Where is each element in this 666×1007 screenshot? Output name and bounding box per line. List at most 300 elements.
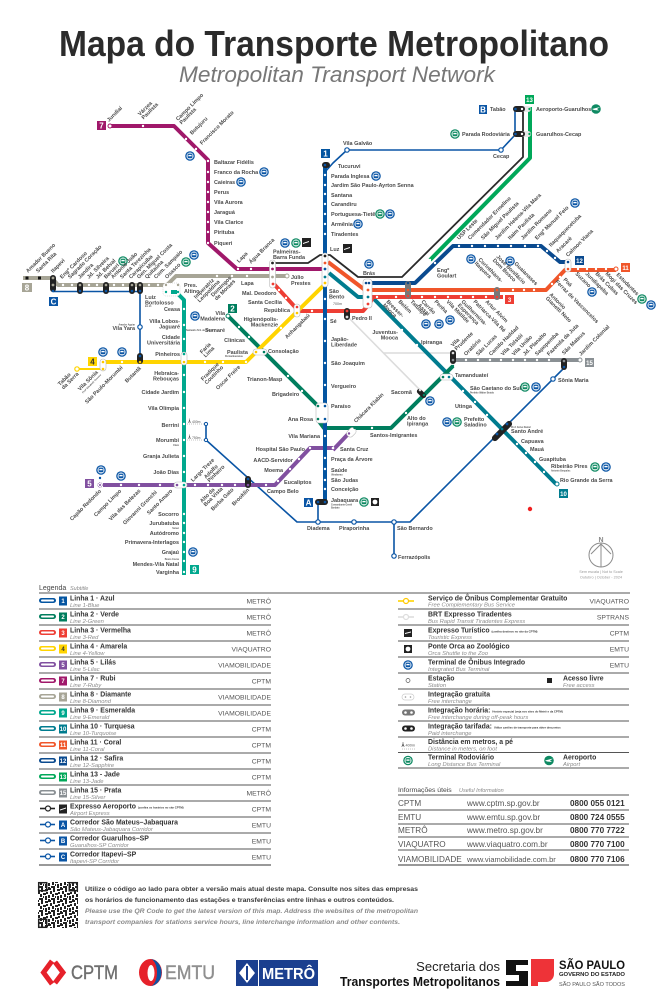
row: airport express: Airport Express [69, 811, 110, 817]
station labels: line 5: Eucaliptos [284, 480, 312, 486]
icon: bus terminal Caieiras [236, 177, 246, 187]
station labels: lines 7 and 8: Santa Rita [35, 251, 59, 274]
icon: road terminal Sao Caetano [520, 382, 530, 392]
row: tourist express [398, 628, 629, 641]
station labels: line 1 and corridors: 700m [333, 302, 342, 306]
station labels: lines 2 and 4: Mal. Deodoro [242, 291, 277, 297]
icon: road terminal Tiete [375, 209, 385, 219]
station labels: line 9 and corridor C [113, 295, 181, 576]
station labels: lines 3, 11, 12: Engº Manuel Feio [534, 205, 571, 241]
badge 8: 8 [25, 284, 30, 292]
row: walking distance: 400m [406, 744, 415, 748]
station labels: lines 7 and 8: Palmeiras- [273, 250, 301, 256]
footer note: transport companies for stations service hours, line interchange information and other contents. [85, 919, 400, 926]
row: VIAMOBILIDADE: VIAMOBILIDADE [398, 855, 462, 864]
station labels: lines 7 and 8: Altino [184, 289, 200, 295]
corridor B Guarulhos-SP [325, 108, 515, 172]
row: CPTM: www.cptm.sp.gov.br [466, 799, 540, 808]
station labels: line 1 and corridors: Japão- [331, 337, 349, 343]
badge 8 [22, 283, 32, 292]
station labels: lines 7 and 8: Barueri [103, 262, 121, 280]
row: METRO: www.metro.sp.gov.br [466, 826, 543, 835]
station labels: lines 2 and 4: da Serra [61, 371, 81, 391]
station labels: lines 2 and 4: Fradique [200, 362, 221, 382]
icon: bus terminal Guaianases [505, 256, 515, 266]
station labels: lines 7 and 8: Lapa [241, 281, 255, 287]
station labels: lines 2 and 4 [57, 291, 489, 439]
row: free bus service: Serviço de Ônibus Complementar Gratuito [428, 594, 567, 602]
row: line 7: 7 [61, 679, 65, 685]
station labels: line 9 and corridor C: km 21 [145, 306, 152, 308]
line 15 prata [453, 358, 582, 362]
row: CPTM: 0800 055 0121 [570, 799, 625, 808]
capsule: Butanta [137, 353, 143, 364]
station labels: line 9 and corridor C: Mendes-Vila Natal [133, 562, 179, 568]
row: CPTM [398, 799, 625, 808]
station labels: lines 3, 11, 12 [352, 192, 640, 334]
station labels: lines 2 and 4: Mackenzie [251, 322, 278, 328]
row: line 9: Linha 9 · Esmeralda [70, 708, 135, 714]
station labels: lines 7 and 8: Francisco Morato [199, 110, 236, 146]
row: line 11: Line 11-Coral [70, 747, 105, 753]
station labels: lines 3, 11, 12: Guilhermina- [460, 299, 488, 327]
station labels: lines 7 and 8: Perus [214, 190, 229, 196]
row: EMTU: EMTU [398, 813, 421, 822]
station labels: lines 10 and 15: Vila Tolstói [500, 333, 525, 357]
icon: tourist express Luz [343, 244, 352, 253]
capsule: Consolacao [253, 349, 267, 355]
station labels: lines 3, 11, 12: Artur Alvim [484, 299, 509, 324]
badge 5 [85, 479, 94, 488]
line 3 vermelha [273, 283, 503, 311]
station labels: lines 10 and 15: Oratório [463, 338, 483, 357]
station labels: lines 3, 11, 12: USP Leste [456, 218, 479, 241]
station labels: lines 2 and 4: Ana Rosa [288, 417, 314, 423]
station labels: lines 7 and 8: Com. Sampaio [153, 249, 185, 280]
logo: METRO: METRÔ [262, 965, 315, 983]
row: line 15: Line 15-Silver [70, 795, 107, 801]
capsule: Tamanduatei [440, 374, 453, 380]
compass: N [598, 537, 604, 544]
station labels: lines 3, 11, 12: Aracaré [555, 236, 574, 254]
station labels: line 1 and corridors: Vila Mariana [288, 434, 321, 440]
row: corridor C: EMTU [252, 854, 271, 862]
capsule: Pedro II [344, 308, 350, 320]
station labels: line 1 and corridors: Liberdade [331, 342, 357, 348]
station labels: lines 10 and 15: Ribeirão Pires [551, 464, 588, 470]
capsule: Tatuape [405, 281, 411, 299]
compass: Sem escala | Not to Scale [579, 570, 623, 574]
airport express line [273, 107, 523, 277]
station labels: line 1 and corridors [288, 107, 591, 561]
icon: road terminal Barueri [118, 256, 128, 266]
station labels: lines 7 and 8: Botujuru [189, 116, 209, 136]
row: road terminal and airport: Airport [562, 762, 580, 768]
logo: SP shapes [506, 959, 554, 986]
station labels: lines 3, 11, 12: Gianetti Neto [544, 296, 573, 324]
station labels: line 9 and corridor C: Socorro [158, 512, 180, 518]
row: paid interchange: Paid interchange [428, 731, 472, 737]
station labels: line 9 and corridor C: Cidade Jardim [142, 390, 179, 396]
capsule: Santo Amaro [174, 482, 187, 488]
walking links Berrini and Morumbi: 750m [192, 436, 201, 440]
station labels: lines 3, 11, 12: Jardim Romano [520, 208, 554, 241]
station labels: line 5: Giovanni Gronchi [122, 490, 159, 526]
row: line 12: 12 [60, 759, 67, 765]
row: corridor C: C [61, 855, 66, 861]
station labels: lines 7 and 8: Caieiras [214, 180, 235, 186]
icon: bus terminal Francisco Morato [185, 151, 195, 161]
badge B: B [480, 106, 486, 114]
government of Sao Paulo wordmark [559, 959, 626, 988]
station labels: lines 7 and 8: Barra Funda [273, 255, 306, 261]
row: corridor C: Itapevi-SP Corridor [70, 859, 120, 865]
icon: road terminal Prefeito Saladino [452, 417, 462, 427]
station labels: line 5: Campo Limpo [93, 488, 124, 518]
station labels: line 5: Vila das Belezas [108, 488, 142, 522]
logo: CPTM: CPTM [71, 963, 118, 984]
station labels: line 9 and corridor C: Grajaú [162, 550, 179, 556]
station labels: lines 3, 11, 12: Penha [433, 299, 449, 316]
row: BRT: Bus Rapid Transit Tiradentes Express [428, 619, 525, 625]
badge 5: 5 [87, 480, 92, 488]
icon: road terminal Osasco [181, 257, 191, 267]
station labels: line 9 and corridor C: Villa Lobos- [149, 319, 180, 325]
station labels: lines 7 and 8: Prestes [291, 281, 311, 287]
capsule: Santo Andre [491, 420, 513, 442]
capsule: Paraiso and Ana Rosa [316, 403, 328, 423]
row: orca shuttle [398, 644, 629, 657]
station labels: lines 2 and 4: Oscar Freire [215, 365, 242, 391]
station labels: lines 2 and 4: Coutinho [204, 365, 225, 386]
footer note: Utilize o código ao lado para obter a versão mais atual deste mapa. Consulte nos sites das empresas [85, 886, 418, 893]
row: corridor B: EMTU [252, 838, 271, 846]
station labels: lines 7 and 8: Jd. Belval [95, 258, 118, 280]
station labels: lines 3, 11, 12: Brás [363, 271, 375, 277]
icon: road terminal Estudantes [637, 294, 647, 304]
line 4 amarela [75, 284, 325, 371]
station labels: lines 3, 11, 12: Assaí [416, 303, 431, 318]
row: line 11: 11 [60, 743, 67, 749]
station labels: lines 7 and 8: de Moraes [214, 279, 237, 302]
station labels: lines 3, 11, 12: Guaianases [513, 261, 538, 287]
station labels: line 5: Pinheiro [207, 464, 227, 484]
row: line 9: Line 9-Emerald [70, 715, 110, 721]
row: line 7: Line 7-Ruby [70, 683, 102, 689]
icon: bus terminal Sao Caetano [531, 382, 541, 392]
row: EMTU: 0800 724 0555 [570, 813, 625, 822]
station labels: lines 2 and 4: São Paulo-Morumbi [84, 365, 125, 405]
station labels: lines 10 and 15: São Mateus [561, 331, 587, 356]
station labels: lines 2 and 4: Butantã [124, 365, 143, 384]
logo: CPTM [44, 961, 118, 984]
station labels: lines 10 and 15: Fazenda da Juta [546, 323, 581, 357]
row: METRO: 0800 770 7722 [570, 826, 625, 835]
station labels: lines 7 and 8: Piqueri [214, 241, 233, 247]
station labels: line 1 and corridors: Jabaquara [331, 498, 359, 504]
capsule: Tucuruvi [322, 162, 330, 168]
station labels: line 1 and corridors: Vila Galvão [343, 141, 373, 147]
government of Sao Paulo wordmark: GOVERNO DO ESTADO [559, 972, 625, 978]
station labels: lines 10 and 15: Jardim Colonial [578, 324, 612, 357]
row: airport express: CPTM [252, 806, 271, 814]
row: corridor B: B [61, 839, 66, 845]
row: walking distance: Distância em metros, a pé [428, 739, 513, 746]
station labels: lines 3, 11, 12: Belém [397, 299, 412, 315]
title: Mapa do Transporte Metropolitano [59, 23, 609, 64]
icon: bus terminal Capao Redondo [96, 465, 106, 475]
row: line 9 [39, 708, 271, 721]
station labels: lines 3, 11, 12: Jundiapeba [584, 271, 610, 297]
icon: bus terminal Eng Manuel Feio [570, 198, 580, 208]
row: tourist express: CPTM [610, 630, 629, 638]
icon: zoo shuttle Jabaquara [371, 498, 379, 506]
icon: tourist express Barra Funda [302, 238, 311, 247]
row: line 11 [39, 740, 271, 753]
row: line 10: Linha 10 · Turquesa [70, 724, 135, 730]
station labels: lines 10 and 15: Santo André [511, 429, 543, 435]
station labels: line 1 and corridors: Luz [330, 247, 340, 253]
station labels: line 1 and corridors: Cecap [493, 154, 510, 160]
row: free interchange: Free interchange [428, 699, 473, 705]
capsule: Sacoma [416, 388, 427, 399]
station labels: lines 3, 11, 12: Suzano [574, 271, 592, 290]
row: line 2: 2 [61, 615, 65, 621]
station labels: lines 2 and 4: Alto do [407, 416, 426, 422]
row: line 7 [39, 676, 271, 689]
station labels: lines 3, 11, 12: Calmon Viana [565, 228, 595, 258]
station labels: lines 3, 11, 12: Itaim Paulista [507, 212, 537, 241]
station labels: line 9 and corridor C: Primavera-Interlagos [125, 540, 179, 546]
logo: EMTU [139, 959, 215, 986]
legend: lines [39, 596, 271, 865]
row: VIAMOBILIDADE: 0800 770 7106 [570, 855, 625, 864]
row: line 12: Line 12-Sapphire [70, 763, 115, 769]
icon: bus terminal Osasco [189, 250, 199, 260]
station labels: lines 2 and 4: Tabão [57, 372, 72, 387]
row: BRT: SPTRANS [597, 614, 629, 622]
station labels: line 9 and corridor C: Granja Julieta [143, 454, 180, 460]
row: line 1 [39, 596, 271, 609]
badge 13 [525, 95, 534, 104]
row: line 4: Linha 4 · Amarela [70, 644, 127, 650]
badge 1 [321, 149, 330, 158]
station labels: line 1 and corridors: Portuguesa-Tietê [331, 212, 375, 218]
useful information heading: Informações úteis [398, 787, 452, 794]
station labels: line 9 and corridor C: Vila Olímpia [148, 406, 180, 412]
station labels: line 9 and corridor C: Claro [173, 445, 180, 447]
station labels: lines 2 and 4: Santos-Imigrantes [370, 433, 417, 439]
station labels: lines 7 and 8: Baltazar Fidélis [214, 160, 254, 166]
station labels: line 9 and corridor C: Luiz [145, 295, 156, 301]
station labels: line 9 and corridor C: Pinheiros [155, 352, 180, 358]
station labels: line 1 and corridors: Piraporinha [339, 526, 370, 532]
station labels: line 5: Adolfo [203, 464, 220, 480]
row: corridor C: Corredor Itapevi–SP [70, 852, 137, 858]
station labels: lines 7 and 8: Várzea [137, 101, 154, 117]
station labels: lines 2 and 4: Chácara Klabin [353, 392, 385, 424]
row: line 13: Line 13-Jade [70, 779, 104, 785]
row: corridor A: Corredor São Mateus–Jabaquara [70, 820, 178, 826]
line number badges [22, 95, 630, 574]
station labels: lines 10 and 15: Prof. Celso Daniel [511, 427, 531, 429]
station labels: line 9 and corridor C: Vila Yara [113, 326, 136, 332]
station labels: line 1 and corridors: Ultrafarma [331, 474, 343, 476]
row: tourist express: Expresso Turístico (confira destinos no site da CPTM) [428, 628, 538, 634]
station labels: lines 2 and 4: República [264, 308, 291, 314]
row: line 4: VIAQUATRO [231, 646, 271, 654]
station labels: lines 2 and 4: Higienópolis- [244, 317, 278, 323]
capsule: Brooklin [245, 476, 251, 488]
station labels: line 5: Hospital São Paulo [256, 447, 306, 453]
station labels: lines 7 and 8: Jaraguá [214, 210, 236, 216]
row: VIAQUATRO: www.viaquatro.com.br [466, 840, 548, 849]
line 8 diamante [23, 274, 289, 285]
interchange capsules [50, 106, 571, 505]
station labels: lines 3, 11, 12: Mooca [381, 303, 398, 320]
badge 7 [97, 121, 106, 130]
capsule: Vila Prudente [450, 350, 456, 367]
station labels: line 1 and corridors: Santana [331, 193, 353, 199]
station labels: lines 10 and 15: Prefeito [464, 417, 484, 423]
station labels: line 1 and corridors: Conceição [331, 487, 359, 493]
station labels: line 1 and corridors: São Bernardo [397, 526, 433, 532]
station labels: lines 2 and 4: Santuário N.S. de Fátima [186, 329, 214, 332]
badge A: A [306, 498, 312, 508]
station labels: lines 3, 11, 12: Poá [562, 277, 574, 289]
station labels: lines 7 and 8: Paulista [141, 101, 161, 121]
corridor C Itapevi-SP [53, 292, 142, 360]
row: orca shuttle: Ponte Orca ao Zoológico [428, 644, 510, 650]
row: line 13 [39, 772, 271, 785]
row: road terminal and airport: Aeroporto [563, 754, 596, 762]
row: integrated bus terminal: EMTU [610, 662, 629, 670]
station labels: lines 2 and 4: Profª Elisabeth Tenreiro [81, 373, 102, 394]
row: corridor B: Corredor Guarulhos–SP [70, 836, 149, 842]
row: CPTM: CPTM [398, 799, 421, 808]
icon: road terminal Parada Rodoviaria [450, 129, 460, 139]
row: corridor A: São Mateus-Jabaquara Corridor [70, 827, 154, 833]
row: station and free access: Acesso livre [563, 676, 604, 682]
icon: bus terminal Parada Inglesa [371, 171, 381, 181]
icon: bus terminal Barra Funda [280, 238, 290, 248]
subtitle: Metropolitan Transport Network [179, 62, 496, 87]
icon: bus terminal Sao Paulo-Morumbi [117, 347, 127, 357]
icon: bus terminal Franco da Rocha [259, 167, 269, 177]
station labels: line 5: Largo Treze [190, 458, 216, 483]
station labels: lines 7 and 8: Imperatriz [193, 278, 216, 300]
badge A [304, 498, 313, 508]
station labels: line 9 and corridor C: Morumbi [156, 438, 179, 444]
station labels: lines 10 and 15 [372, 323, 614, 484]
station labels: lines 3, 11, 12: Itaquaquecetuba [548, 213, 584, 248]
station labels: lines 10 and 15: Antonio Bespalec [551, 470, 571, 472]
line 12 safira [366, 246, 568, 283]
compass: Outubro | October - 2024 [580, 576, 622, 580]
station labels: lines 10 and 15: Ipiranga [421, 340, 443, 346]
station labels: line 9 and corridor C: Ceasa [164, 307, 181, 313]
capsule: Pinheiros [181, 352, 187, 365]
row: line 12: CPTM [252, 758, 271, 766]
row: off-peak interchange: Free interchange during off-peak hours [428, 715, 528, 721]
walking links Berrini and Morumbi: 400m [192, 420, 201, 424]
station labels: line 9 and corridor C: Jaguaré [159, 324, 180, 330]
station labels: lines 7 and 8: Domingos [210, 275, 233, 298]
government secretariat wordmark [340, 959, 500, 989]
station labels: lines 2 and 4: Brigadeiro [272, 392, 300, 398]
station labels: line 1 and corridors: Barbato [331, 506, 340, 510]
row: VIAQUATRO: 0800 770 7100 [570, 840, 625, 849]
row: line 12: Linha 12 · Safira [70, 756, 123, 762]
station labels: line 1 and corridors: Ferrazópolis [398, 555, 430, 561]
walking links Berrini and Morumbi [187, 418, 205, 440]
row: line 11: Linha 11 · Coral [70, 740, 121, 746]
station labels: lines 3, 11, 12: Vila Matilde [445, 299, 470, 325]
station labels: line 9 and corridor C: Hebraica- [154, 371, 179, 377]
logo: EMTU: EMTU [165, 963, 215, 984]
row: METRO: METRÔ [398, 825, 428, 835]
legend heading [39, 585, 88, 592]
row: road terminal and airport [398, 754, 629, 768]
station labels: lines 2 and 4: Madalena [200, 316, 226, 322]
station labels: lines 10 and 15: São Caetano do Sul [470, 386, 522, 392]
capsule: Republica [294, 304, 300, 317]
row: VIAQUATRO: VIAQUATRO [398, 840, 446, 849]
station labels: line 5: Capão Redondo [69, 488, 103, 522]
icon: bus terminal Bras [364, 259, 374, 269]
line 13 jade [430, 107, 530, 260]
station labels: lines 2 and 4: Consolação [268, 349, 299, 355]
row: line 8: Line 8-Diamond [70, 699, 112, 705]
station labels: lines 2 and 4: Ipiranga [407, 422, 429, 428]
row: corridor C [39, 852, 271, 865]
icon: bus terminal Jundiapeba [587, 287, 597, 297]
station labels: line 9 and corridor C: Universitária [147, 340, 181, 346]
station labels: lines 3, 11, 12: Pedro II [352, 316, 372, 322]
row: integrated bus terminal: Terminal de Ônibus Integrado [428, 658, 525, 666]
row: line 15: 15 [60, 791, 67, 797]
station labels: lines 10 and 15: Utinga [455, 404, 473, 410]
row: line 4: Line 4-Yellow [70, 651, 105, 657]
station labels: lines 7 and 8: Água Branca [247, 236, 277, 265]
station labels: line 1 and corridors: São Judas [331, 478, 358, 484]
row: line 13: 13 [60, 775, 67, 781]
badge 9: 9 [192, 566, 197, 574]
station labels: lines 10 and 15: Mooca [381, 336, 399, 342]
capsule: Bras [363, 279, 372, 308]
station labels: line 5: Boa Vista [203, 486, 225, 508]
row: station and free access [398, 676, 629, 689]
capsule: Tabao [513, 106, 531, 112]
row: line 5: Linha 5 · Lilás [70, 660, 116, 666]
station labels: lines 10 and 15: Juventus- [372, 330, 398, 336]
station labels: line 9 and corridor C: Cidade [162, 335, 180, 341]
station labels: lines 7 and 8: Franco da Rocha [214, 170, 259, 176]
capsule: Luz [322, 253, 328, 287]
row: line 10: 10 [60, 727, 67, 733]
row: corridor A [39, 820, 271, 833]
row: free bus service: VIAQUATRO [589, 598, 629, 606]
station labels: lines 10 and 15: Sapopemba [534, 331, 561, 357]
station labels: line 1 and corridors: Armênia [331, 222, 354, 228]
map network [22, 92, 656, 580]
capsule: Santa Cruz [324, 447, 334, 449]
station labels: lines 7 and 8: Vila Clarice [214, 220, 243, 226]
station labels: line 9 and corridor C: Autódromo [150, 531, 180, 537]
icon: road terminal Ribeirao Pires [590, 462, 600, 472]
capsule: Cecap [513, 131, 531, 137]
station labels: lines 7 and 8: Quitaúna [144, 259, 166, 280]
